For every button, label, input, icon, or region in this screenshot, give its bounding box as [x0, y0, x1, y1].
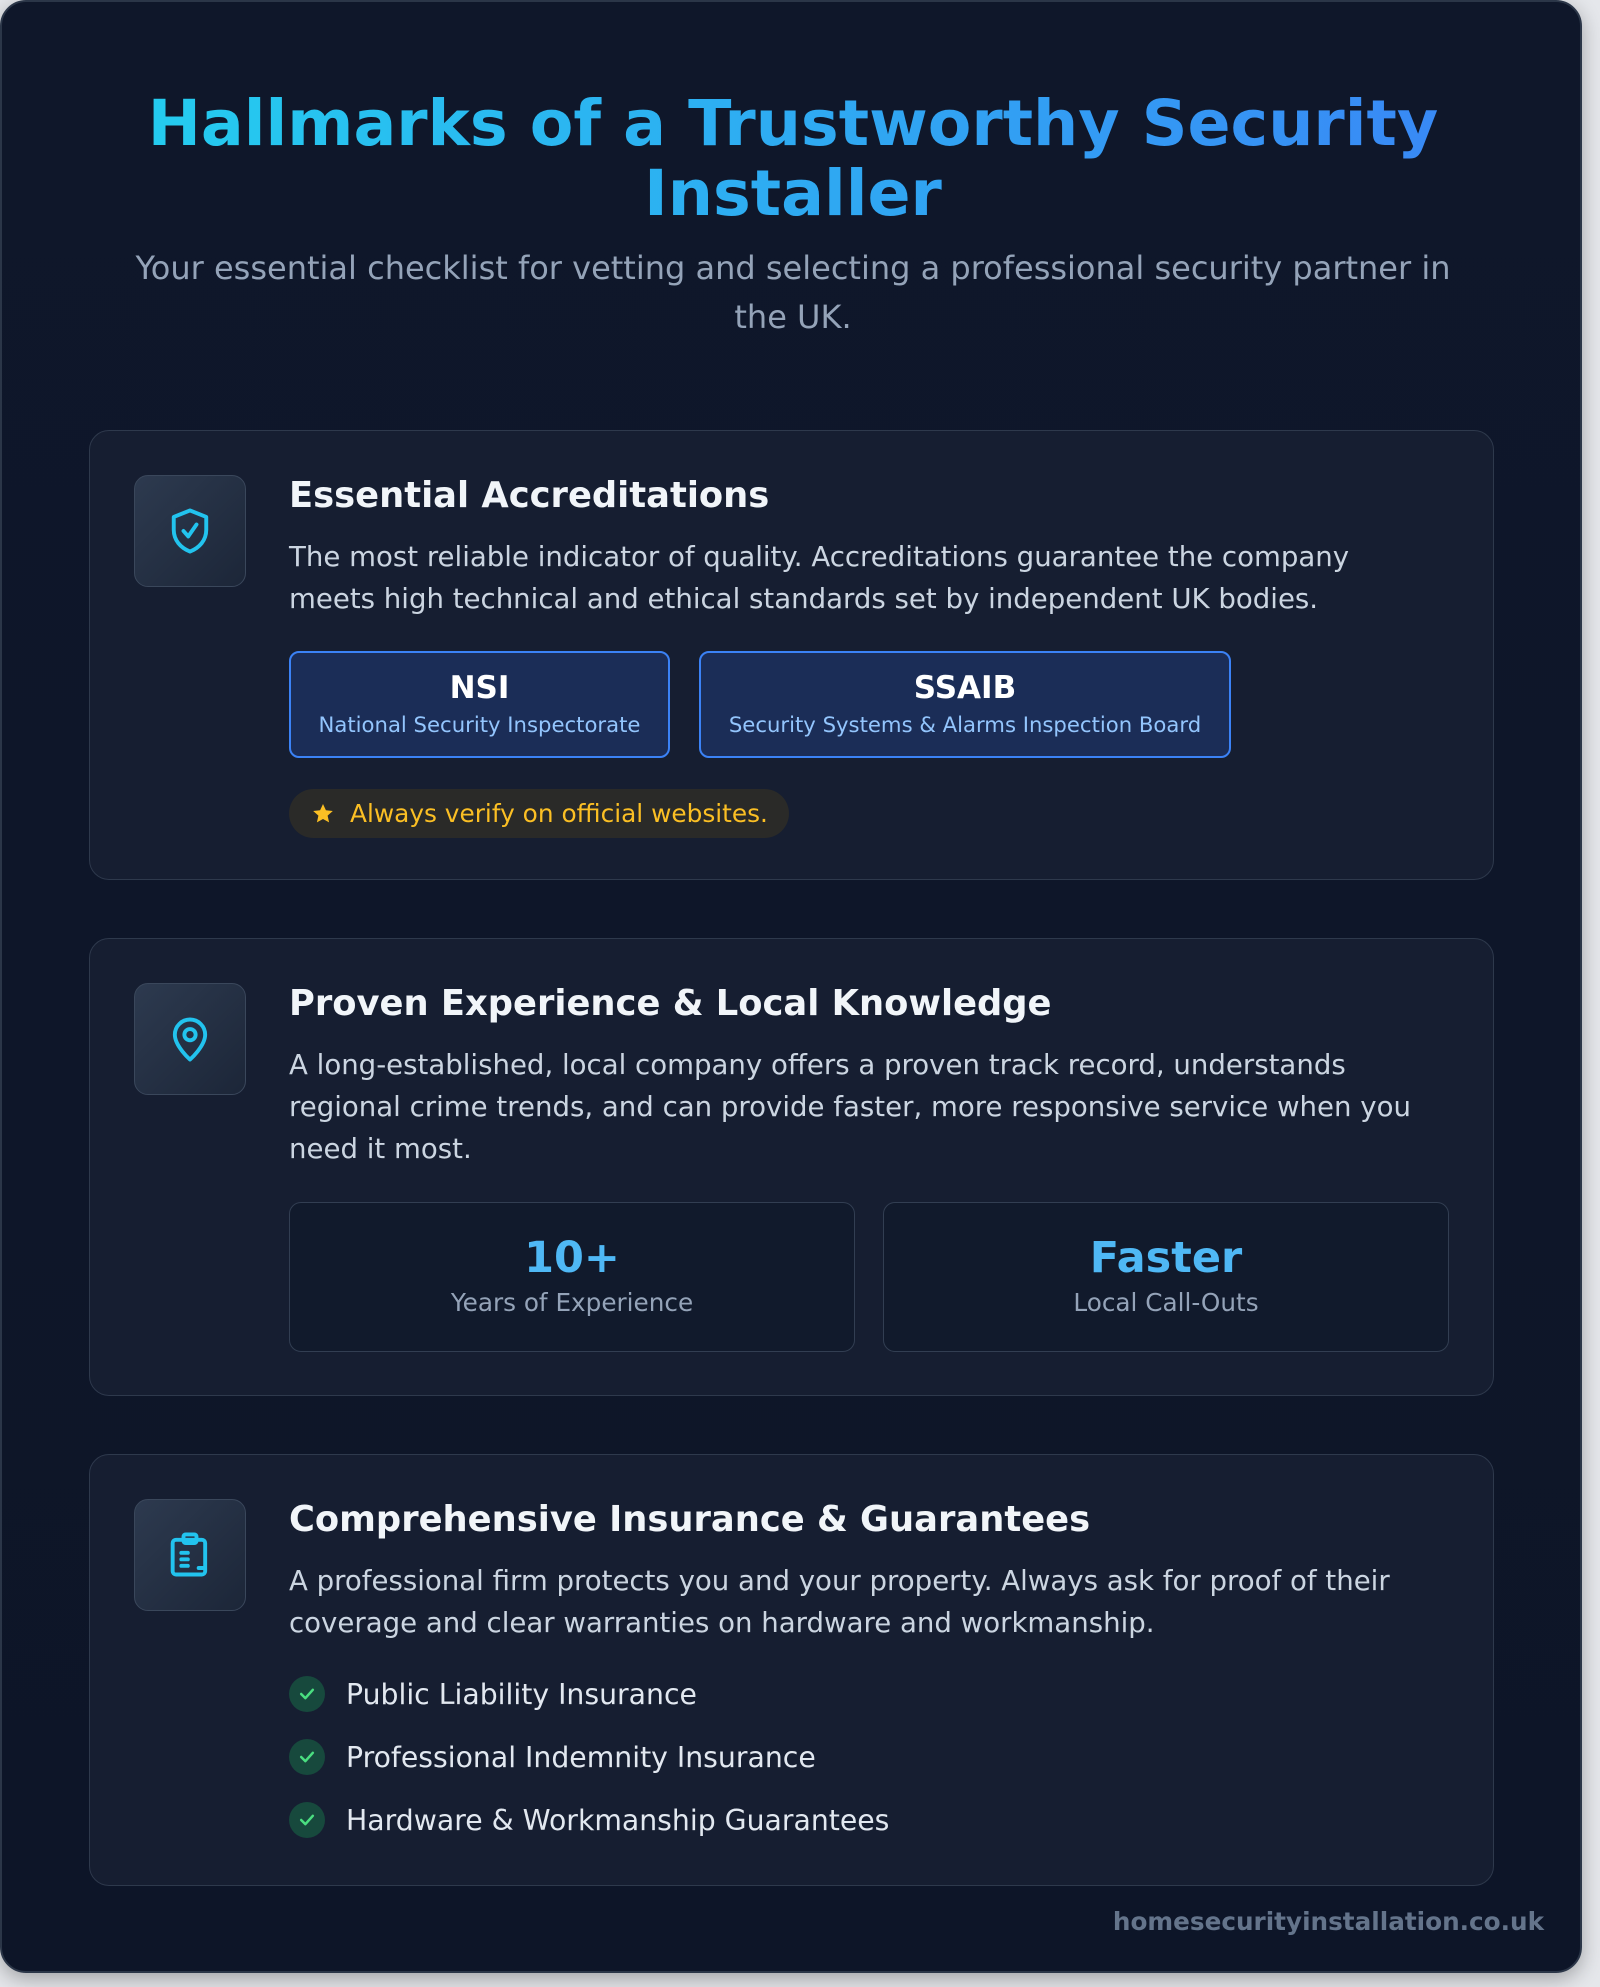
stat: faster — [883, 1202, 1449, 1352]
icon: location pin — [134, 983, 246, 1095]
icon: clipboard — [134, 1499, 246, 1611]
panel: experience — [89, 938, 1494, 1396]
stat: faster: Local Call-Outs — [1073, 1288, 1259, 1317]
title: Hallmarks of a Trustworthy Security — [148, 86, 1438, 160]
icon: shield — [134, 475, 246, 587]
heading: Proven Experience & Local Knowledge — [289, 983, 1052, 1024]
badge: NSI: NSI — [450, 670, 509, 706]
body text: The most reliable indicator of quality. Accreditations guarantee the company meets high technical and ethical standards set by independent UK bodies. — [289, 540, 1349, 615]
body text: A long-established, local company offers a proven track record, understands regional crime trends, and can provide faster, more responsive service when you need it most. — [289, 1048, 1411, 1165]
checklist item 1: Public Liability Insurance — [346, 1678, 697, 1710]
stat: years: 10+ — [524, 1233, 620, 1283]
callout: verify — [289, 789, 789, 838]
heading: Comprehensive Insurance & Guarantees — [289, 1499, 1090, 1540]
badge: NSI: National Security Inspectorate — [319, 712, 640, 737]
panel: accreditations — [89, 430, 1494, 880]
badge: NSI — [289, 651, 670, 758]
panel: insurance — [89, 1454, 1494, 1886]
stat: years: Years of Experience — [451, 1288, 693, 1317]
body text: A professional firm protects you and your property. Always ask for proof of their coverage and clear warranties on hardware and workmanship. — [289, 1564, 1390, 1639]
footer: homesecurityinstallation.co.uk — [1113, 1907, 1544, 1936]
title: Installer — [644, 156, 942, 230]
title — [2, 88, 1584, 228]
stat: years — [289, 1202, 855, 1352]
callout: verify: Always verify on official websites. — [350, 799, 768, 828]
badge: SSAIB: Security Systems & Alarms Inspection Board — [729, 712, 1201, 737]
checklist item 3: Hardware & Workmanship Guarantees — [346, 1804, 889, 1836]
subtitle: Your essential checklist for vetting and selecting a professional security partner in the UK. — [136, 249, 1450, 336]
badge: SSAIB — [699, 651, 1231, 758]
checklist item 2: Professional Indemnity Insurance — [346, 1740, 816, 1774]
heading: Essential Accreditations — [289, 475, 769, 516]
badge: SSAIB: SSAIB — [914, 670, 1016, 706]
stat: faster: Faster — [1090, 1233, 1242, 1283]
